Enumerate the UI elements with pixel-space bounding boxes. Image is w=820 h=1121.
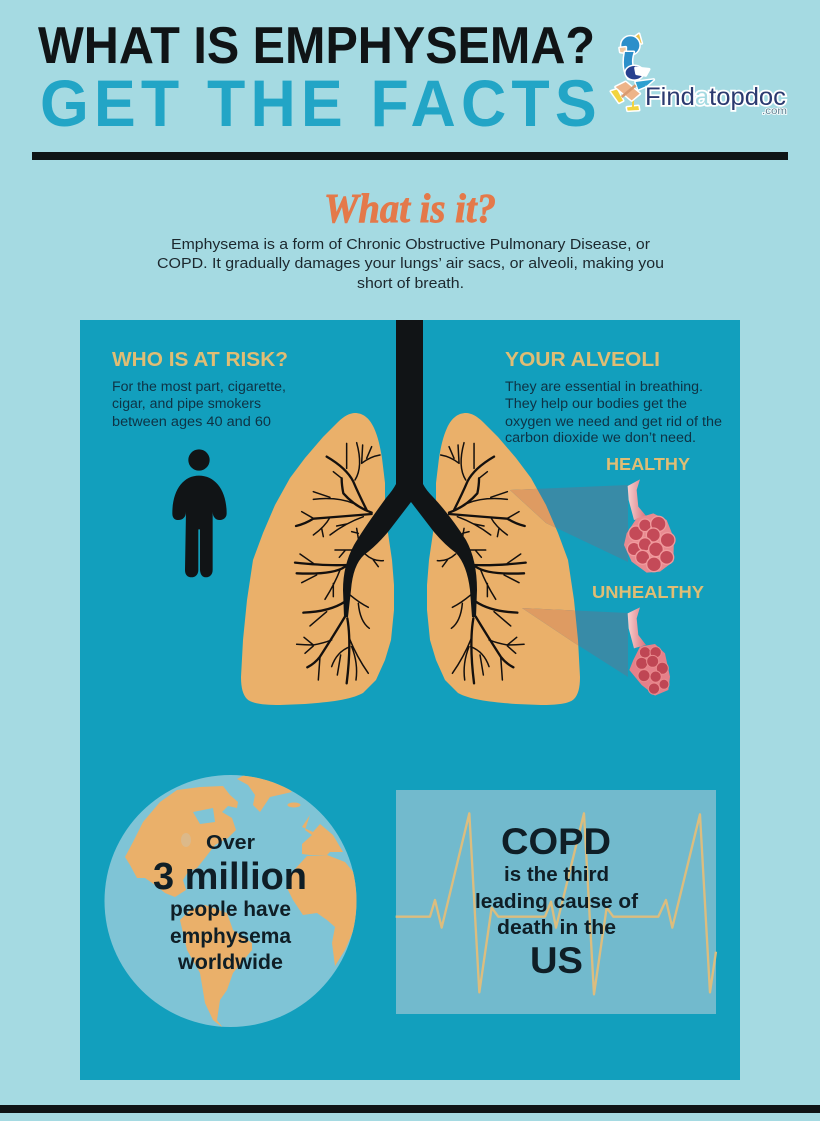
globe text: 3 million	[153, 856, 307, 898]
subtitle: get the facts: GET THE FACTS	[40, 67, 597, 140]
panel: main teal panel	[80, 320, 740, 1080]
alveoli text block: They help our bodies get the	[505, 396, 687, 411]
alveoli text block: carbon dioxide we don’t need.	[505, 430, 696, 445]
alveoli text block: They are essential in breathing.	[505, 379, 703, 394]
panel: who is at risk	[112, 348, 288, 577]
intro text block	[157, 236, 664, 292]
panel background	[396, 790, 716, 1014]
COPD text: COPD	[501, 821, 611, 862]
COPD text: is the third	[504, 864, 609, 886]
title: what is emphysema: WHAT IS EMPHYSEMA?	[38, 17, 595, 75]
globe	[104, 772, 360, 1028]
logo wordmark: Findatopdoc	[645, 83, 786, 111]
header rule	[32, 152, 788, 160]
zoom wedge: healthy	[510, 485, 628, 562]
heading: who is at risk: WHO IS AT RISK?	[112, 348, 288, 371]
icon: healthy alveolus	[624, 479, 675, 573]
COPD text	[475, 821, 638, 981]
heading: your alveoli: YOUR ALVEOLI	[505, 348, 660, 371]
heartbeat line	[396, 813, 716, 994]
footer rule	[0, 1105, 820, 1113]
globe text: emphysema	[170, 925, 291, 948]
intro text block: COPD. It gradually damages your lungs’ air sacs, or alveoli, making you	[157, 255, 664, 272]
COPD text: leading cause of	[475, 891, 638, 913]
left lung	[241, 413, 394, 705]
label: unhealthy: UNHEALTHY	[592, 582, 704, 602]
icon: unhealthy alveolus	[628, 607, 670, 696]
intro text block: short of breath.	[357, 275, 464, 292]
label: healthy: HEALTHY	[606, 454, 690, 474]
globe text: Over	[206, 832, 255, 854]
globe text: people have	[170, 898, 291, 921]
bronchial tree: left	[295, 443, 383, 683]
globe stat	[104, 772, 360, 1028]
risk text block: between ages 40 and 60	[112, 414, 271, 429]
risk text block: cigar, and pipe smokers	[112, 396, 261, 411]
lungs illustration	[241, 320, 628, 705]
icon: duck mascot	[611, 34, 654, 111]
panel: COPD stat	[396, 790, 716, 1014]
alveoli text block: oxygen we need and get rid of the	[505, 414, 722, 429]
trachea and main bronchi	[343, 320, 477, 617]
logo .com: .com	[762, 106, 787, 117]
right lung	[427, 413, 580, 705]
heading: what is it: What is it?	[324, 185, 496, 231]
panel: your alveoli	[505, 348, 722, 445]
bronchial tree: right	[437, 443, 526, 683]
zoom wedge: unhealthy	[522, 608, 628, 677]
globe text: worldwide	[177, 951, 283, 974]
intro text block: Emphysema is a form of Chronic Obstructive Pulmonary Disease, or	[171, 236, 650, 253]
alveoli text block	[505, 379, 722, 445]
risk text block: For the most part, cigarette,	[112, 379, 286, 394]
COPD text: US	[530, 940, 583, 981]
logo: Findatopdoc	[611, 34, 787, 117]
icon: person	[172, 449, 227, 577]
COPD text: death in the	[497, 917, 616, 939]
globe text	[153, 832, 307, 974]
risk text block	[112, 379, 286, 429]
